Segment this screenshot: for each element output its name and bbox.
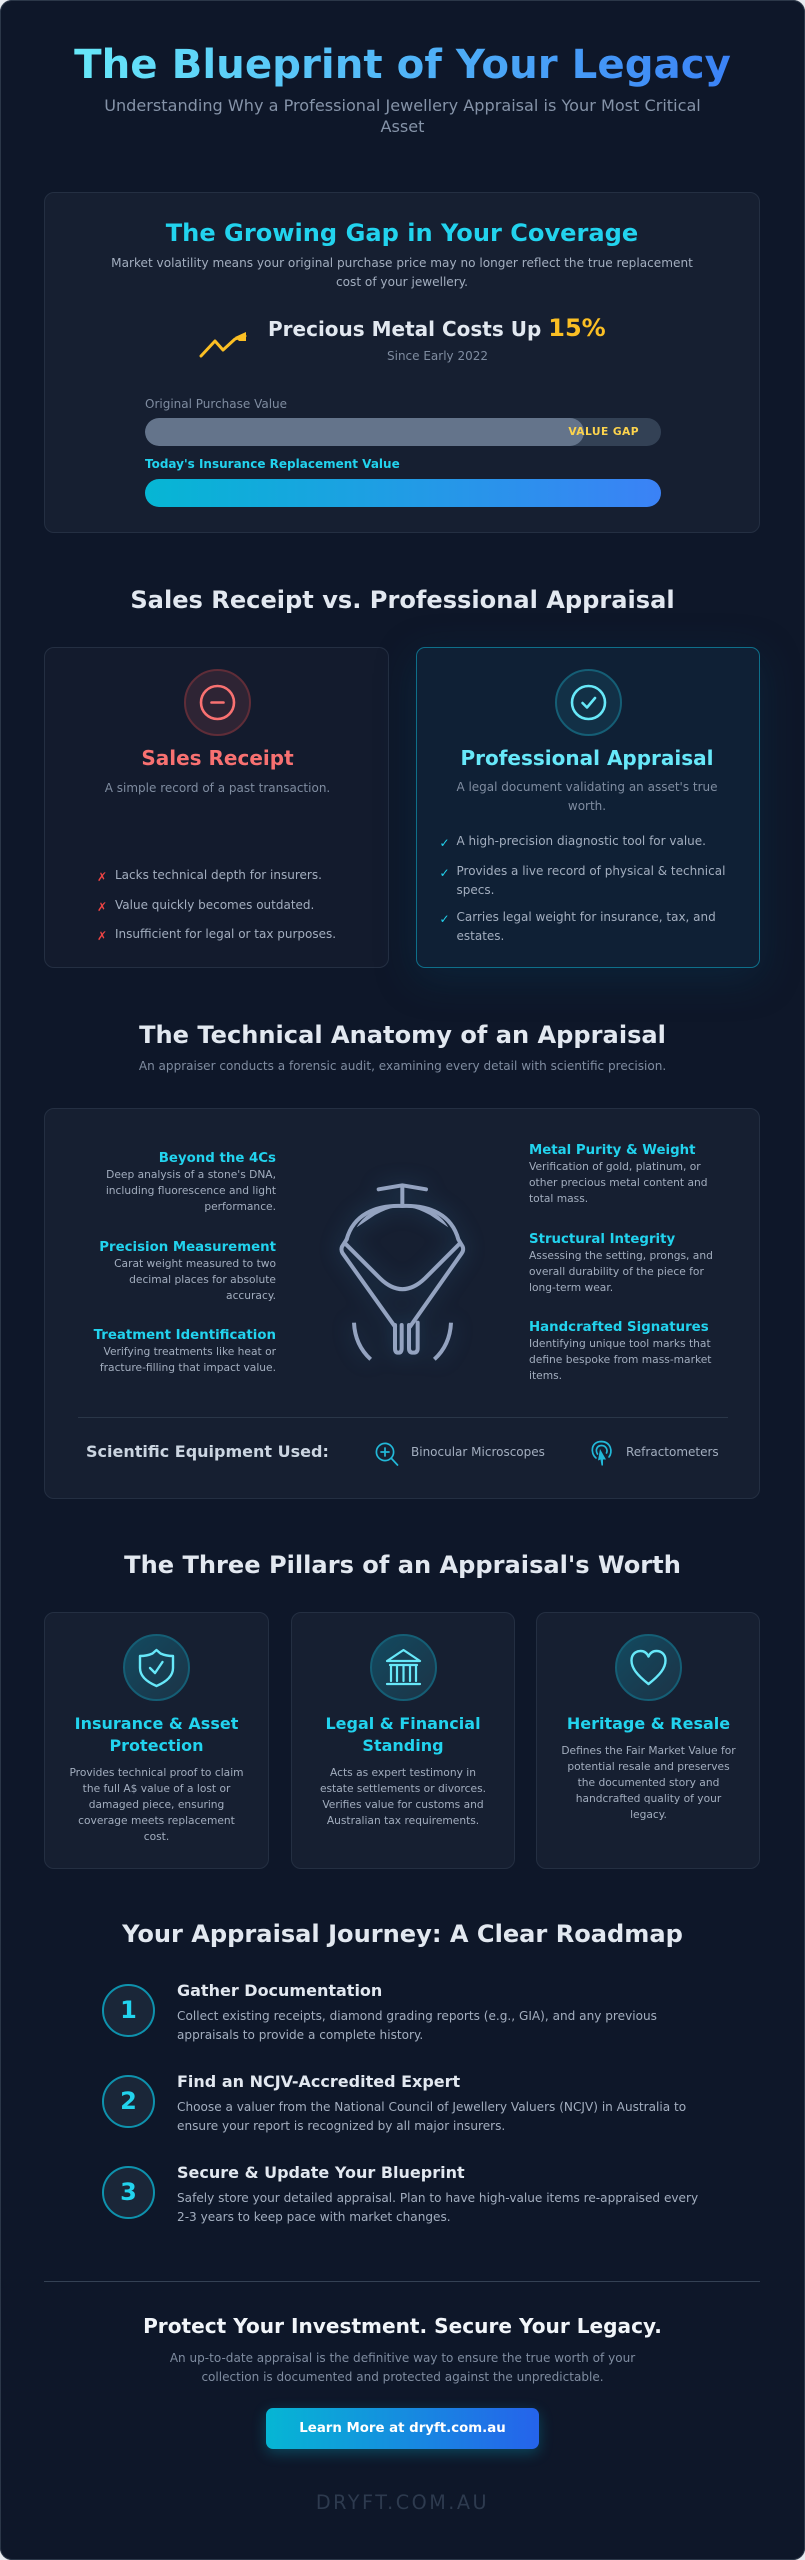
drawback 3: Insufficient for legal or tax purposes. (115, 927, 336, 941)
callout text: total mass. (529, 1192, 588, 1205)
bar label: original value: Original Purchase Value (145, 397, 287, 411)
step text: 2-3 years to keep pace with market changes. (177, 2210, 451, 2224)
callout text: Identifying unique tool marks that (529, 1337, 711, 1350)
callout: treatment identification: Treatment Identification (94, 1328, 276, 1343)
icon: minus circle (184, 669, 251, 736)
card heading: Insurance & Asset (75, 1714, 238, 1733)
callout: precision measurement: Precision Measurement (99, 1240, 276, 1255)
callout text: Assessing the setting, prongs, and (529, 1249, 713, 1262)
panel: professional appraisal (416, 647, 760, 968)
card text: cost. (144, 1830, 169, 1843)
callout text (106, 1168, 276, 1213)
card text: damaged piece, ensuring (89, 1798, 224, 1811)
benefit 3: estates. (456, 929, 504, 943)
callout text: Carat weight measured to two (114, 1257, 276, 1270)
panel: insurance and asset protection (44, 1612, 269, 1869)
step 3 (102, 2163, 698, 2224)
closing text: An up-to-date appraisal is the definitive way to ensure the true worth of your (170, 2351, 635, 2365)
card heading (325, 1714, 481, 1754)
step heading: Find an NCJV-Accredited Expert (177, 2072, 460, 2091)
cross 1: ✗ (97, 870, 107, 884)
callout text (100, 1345, 276, 1374)
icon: check circle (555, 669, 622, 736)
callout: treatment identification (94, 1328, 276, 1374)
card heading: Legal & Financial (325, 1714, 481, 1733)
callout text: including fluorescence and light (106, 1184, 276, 1197)
icon: institution (370, 1634, 437, 1701)
panel: sales receipt (44, 647, 389, 968)
drawback 2: Value quickly becomes outdated. (115, 898, 314, 912)
panel: the growing gap (44, 192, 760, 533)
callout: beyond the 4Cs: Beyond the 4Cs (159, 1151, 276, 1166)
card description (456, 780, 718, 813)
tick 2: ✓ (440, 866, 450, 880)
card text: potential resale and preserves (567, 1760, 730, 1773)
section description: An appraiser conducts a forensic audit, examining every detail with scientific precision. (139, 1059, 666, 1073)
panel: anatomy (44, 1108, 760, 1499)
step text: Safely store your detailed appraisal. Plan to have high-value items re-appraised every (177, 2191, 698, 2205)
panel description: Market volatility means your original purchase price may no longer reflect the true replacement (111, 256, 693, 270)
callout text: long-term wear. (529, 1281, 613, 1294)
callout: beyond the 4Cs (106, 1151, 276, 1213)
card description: worth. (568, 799, 606, 813)
bar label: replacement value: Today's Insurance Replacement Value (145, 457, 400, 471)
callout text (529, 1337, 712, 1382)
step text: appraisals to provide a complete history. (177, 2028, 423, 2042)
card text: handcrafted quality of your (576, 1792, 721, 1805)
heading: comparison: Sales Receipt vs. Professional Appraisal (130, 586, 675, 614)
callout: structural integrity (529, 1232, 713, 1294)
step number: 3 (120, 2178, 137, 2206)
benefit 3 (456, 910, 716, 943)
card heading: Sales Receipt (141, 746, 294, 770)
icon: shield (123, 1634, 190, 1701)
card heading: Protection (109, 1736, 204, 1754)
cross 3: ✗ (97, 929, 107, 943)
step heading: Gather Documentation (177, 1981, 382, 2000)
value gap label: VALUE GAP (568, 425, 639, 438)
callout text (529, 1249, 713, 1294)
card description: A simple record of a past transaction. (105, 781, 330, 795)
step text (177, 2009, 657, 2042)
benefit 2 (456, 864, 725, 897)
callout: handcrafted signatures (529, 1320, 712, 1382)
card text: coverage meets replacement (78, 1814, 235, 1827)
step number: 1 (120, 1996, 137, 2024)
callout text: decimal places for absolute (129, 1273, 276, 1286)
callout text: other precious metal content and (529, 1176, 708, 1189)
callout text: items. (529, 1369, 562, 1382)
callout text: Verification of gold, platinum, or (529, 1160, 701, 1173)
benefit 2: Provides a live record of physical & technical (456, 864, 725, 878)
subtitle: Asset (380, 117, 424, 136)
heading: three pillars: The Three Pillars of an Appraisal's Worth (124, 1551, 681, 1579)
step heading: Secure & Update Your Blueprint (177, 2163, 465, 2182)
card text: Defines the Fair Market Value for (561, 1744, 736, 1757)
callout text: fracture-filling that impact value. (100, 1361, 276, 1374)
callout text: Verifying treatments like heat or (104, 1345, 276, 1358)
card text: the full A$ value of a lost or (83, 1782, 230, 1795)
panel: legal and financial standing (290, 1612, 515, 1869)
button: learn more (266, 2408, 539, 2449)
callout text (114, 1257, 276, 1302)
step text (177, 2189, 698, 2226)
card heading: Heritage & Resale (567, 1714, 730, 1733)
subtitle: Understanding Why a Professional Jewellery Appraisal is Your Most Critical (104, 96, 701, 115)
step number: 2 (120, 2087, 137, 2115)
benefit 1: A high-precision diagnostic tool for value. (456, 834, 706, 848)
card heading: Standing (362, 1736, 444, 1754)
step text: Collect existing receipts, diamond grading reports (e.g., GIA), and any previous (177, 2009, 657, 2023)
card text: the documented story and (578, 1776, 719, 1789)
cross 2: ✗ (97, 900, 107, 914)
callout: handcrafted signatures: Handcrafted Signatures (529, 1320, 709, 1335)
step text: Choose a valuer from the National Council of Jewellery Valuers (NCJV) in Australia to (177, 2100, 686, 2114)
step text (177, 2100, 686, 2133)
callout: metal purity (529, 1143, 708, 1205)
button: learn more: Learn More at dryft.com.au (299, 2421, 506, 2436)
card text (320, 1766, 486, 1827)
callout text: overall durability of the piece for (529, 1265, 704, 1278)
list: appraisal benefits (440, 834, 725, 943)
card text: estate settlements or divorces. (320, 1782, 486, 1795)
step text: ensure your report is recognized by all major insurers. (177, 2119, 505, 2133)
callout text: define bespoke from mass-market (529, 1353, 711, 1366)
drawback 1: Lacks technical depth for insurers. (115, 868, 322, 882)
icon: microscope lens (376, 1442, 398, 1466)
callout text: performance. (204, 1200, 276, 1213)
card heading: Professional Appraisal (460, 746, 714, 770)
card description: A legal document validating an asset's true (456, 780, 718, 794)
card text: Australian tax requirements. (327, 1814, 479, 1827)
icon: diamond ring (339, 1182, 466, 1361)
bar: replacement value (145, 479, 661, 507)
callout: structural integrity: Structural Integrity (529, 1232, 675, 1247)
callout: metal purity: Metal Purity & Weight (529, 1143, 695, 1158)
heading: technical anatomy: The Technical Anatomy of an Appraisal (139, 1021, 666, 1049)
bar: original value with gap (145, 418, 661, 446)
list: receipt drawbacks (97, 868, 336, 943)
card text (69, 1766, 244, 1843)
icon: rising trend (199, 332, 246, 358)
closing heading: Protect Your Investment. Secure Your Legacy. (143, 2314, 662, 2338)
step number (102, 2166, 155, 2219)
tick 3: ✓ (440, 912, 450, 926)
equipment: binocular microscopes: Binocular Microscopes (411, 1445, 545, 1459)
card text (561, 1744, 736, 1821)
callout text: Deep analysis of a stone's DNA, (106, 1168, 276, 1181)
equipment label: Scientific Equipment Used: (86, 1442, 329, 1461)
step number (102, 2075, 155, 2128)
bar fill (145, 418, 584, 446)
icon: heart (615, 1634, 682, 1701)
panel: heritage and resale (536, 1612, 760, 1869)
callout: precision measurement (99, 1240, 276, 1302)
callout text: accuracy. (226, 1289, 276, 1302)
step 2 (102, 2072, 686, 2133)
stat note: Since Early 2022 (387, 349, 488, 363)
tick 1: ✓ (440, 836, 450, 850)
card text: Acts as expert testimony in (330, 1766, 476, 1779)
closing text: collection is documented and protected against the unpredictable. (201, 2370, 604, 2384)
equipment: refractometers: Refractometers (626, 1445, 719, 1459)
card heading (75, 1714, 238, 1754)
subtitle (104, 96, 701, 136)
divider (78, 1417, 728, 1418)
panel heading: The Growing Gap in Your Coverage (166, 219, 638, 247)
benefit 3: Carries legal weight for insurance, tax, and (456, 910, 716, 924)
footer mark: DRYFT.COM.AU (316, 2491, 489, 2514)
benefit 2: specs. (456, 883, 494, 897)
divider (44, 2281, 760, 2282)
step number (102, 1984, 155, 2037)
step 1 (102, 1981, 657, 2042)
stat headline: Precious Metal Costs Up 15% (268, 314, 606, 342)
closing text (0, 2349, 805, 2386)
card text: Verifies value for customs and (322, 1798, 484, 1811)
panel description (111, 256, 693, 289)
heading: roadmap: Your Appraisal Journey: A Clear Roadmap (122, 1920, 683, 1948)
card text: legacy. (630, 1808, 667, 1821)
title: The Blueprint of Your Legacy (74, 41, 731, 88)
icon: refractometer (592, 1440, 612, 1466)
panel description: cost of your jewellery. (336, 275, 468, 289)
callout text (529, 1160, 708, 1205)
card text: Provides technical proof to claim (69, 1766, 244, 1779)
